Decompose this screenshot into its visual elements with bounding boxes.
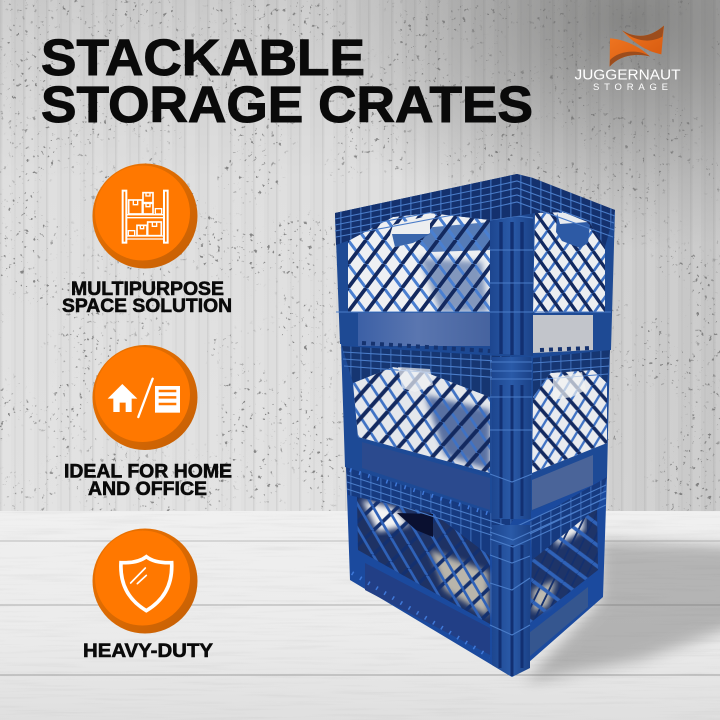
icon: orange disc with shield	[92, 528, 198, 634]
lower panels	[362, 442, 490, 510]
base ticks	[352, 573, 490, 657]
label: SPACE SOLUTION	[62, 295, 232, 317]
left window lattice	[357, 497, 490, 624]
left window lattice	[348, 213, 490, 312]
background: concrete wall	[0, 0, 720, 512]
icon: logo ribbon	[610, 26, 664, 67]
title	[41, 29, 533, 133]
left window lattice	[353, 367, 490, 473]
label: AND OFFICE	[88, 478, 207, 500]
logo wordmark: JUGGERNAUT	[574, 66, 680, 84]
feature: heavy-duty	[83, 528, 213, 662]
hand openings	[398, 367, 433, 392]
base ticks	[362, 343, 592, 351]
right window lattice	[530, 507, 598, 623]
label: HEAVY-DUTY	[83, 640, 213, 662]
stacked blue crates	[335, 174, 615, 677]
top band ribs	[335, 174, 615, 247]
right hand opening	[556, 213, 590, 248]
corner post	[490, 174, 533, 356]
logo: Juggernaut Storage	[574, 26, 680, 93]
lower panels	[358, 313, 490, 346]
middle crate	[341, 342, 610, 520]
title: STACKABLE	[41, 29, 365, 86]
title: STORAGE CRATES	[41, 76, 533, 133]
feature: multipurpose space solution	[62, 164, 232, 317]
background: wooden floor	[0, 511, 720, 720]
icon: orange disc with shelves	[92, 164, 198, 268]
lower panels	[365, 563, 490, 655]
top crate	[335, 174, 615, 356]
right window lattice	[533, 212, 605, 313]
corner post	[492, 357, 531, 519]
bottom crate	[346, 465, 607, 677]
crate shadow on floor	[525, 540, 720, 682]
base ticks	[350, 470, 490, 514]
label: MULTIPURPOSE	[71, 278, 224, 300]
top band ribs	[342, 346, 515, 397]
icon: orange disc with house and document	[92, 345, 198, 450]
feature: ideal for home and office	[64, 345, 232, 500]
label	[64, 460, 232, 500]
label	[62, 278, 232, 317]
top band ribs	[346, 467, 513, 556]
logo subtitle: STORAGE	[593, 82, 668, 93]
right window lattice	[532, 370, 607, 473]
corner post	[492, 525, 530, 677]
label: IDEAL FOR HOME	[64, 460, 232, 482]
left hand opening	[390, 215, 430, 247]
